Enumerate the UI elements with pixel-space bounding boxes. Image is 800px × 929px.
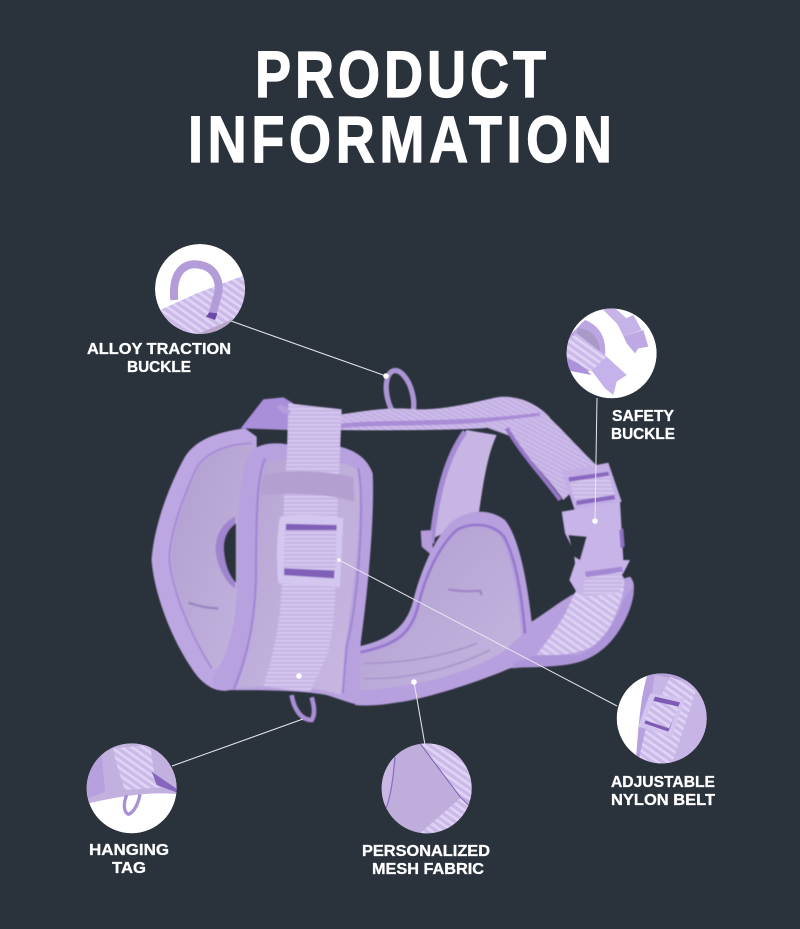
hanging tag ring: [292, 695, 314, 720]
left wing inner panel: [172, 445, 257, 673]
left wing piping: [169, 443, 252, 668]
right wing inner panel: [357, 527, 522, 690]
connector: alloy traction buckle: [231, 321, 389, 379]
label: safety buckle: BUCKLE: [611, 426, 675, 443]
label: alloy traction buckle: [87, 341, 231, 376]
connector: mesh fabric: [411, 679, 425, 745]
back strap: top band: [337, 397, 550, 430]
right wing stitch: [448, 589, 482, 595]
neck panel behind right wing: [430, 430, 497, 540]
title: PRODUCT: [255, 37, 546, 111]
neck panel edge: [432, 432, 465, 543]
right shoulder strap: [475, 415, 598, 500]
callout circle: hanging tag: [85, 742, 178, 833]
label: personalized mesh fabric: [362, 843, 490, 878]
label: safety buckle: [611, 408, 675, 443]
back strap: left: [241, 397, 293, 430]
label: alloy traction buckle: BUCKLE: [127, 359, 191, 376]
label: personalized mesh fabric: PERSONALIZED: [362, 843, 490, 860]
lower right webbing: [537, 572, 624, 655]
label: hanging tag: TAG: [112, 860, 146, 877]
keeper loop: [261, 471, 354, 502]
callout circle: alloy traction buckle: [155, 244, 250, 338]
right wing piping: [358, 525, 525, 653]
small side tab: [421, 530, 433, 557]
chest seam lines: [363, 643, 490, 679]
right wing outer padding: [355, 512, 634, 705]
title: INFORMATION: [188, 102, 612, 176]
callout circle: safety buckle: [563, 307, 657, 398]
label: hanging tag: HANGING: [89, 842, 169, 859]
upper buckle frame: [562, 463, 622, 514]
connector: hanging tag: [172, 673, 303, 766]
buckle body: [562, 502, 630, 595]
left wing stitch: [188, 603, 218, 608]
main strap: [263, 403, 342, 692]
callout circle: adjustable nylon belt: [617, 672, 708, 765]
label: hanging tag: [89, 842, 169, 877]
harness illustration: [152, 368, 634, 720]
connector: safety buckle: [592, 398, 598, 524]
label: adjustable nylon belt: [611, 774, 716, 809]
buckle: safety buckle: [562, 463, 630, 597]
label: adjustable nylon belt: NYLON BELT: [611, 792, 716, 809]
back strap edge: [340, 415, 540, 426]
strap through buckle: [568, 472, 615, 504]
leg hole: [216, 517, 235, 588]
title: [188, 37, 612, 176]
front panel piping: [233, 458, 361, 693]
lower right panel: [513, 587, 634, 668]
connector: adjustable nylon belt: [337, 558, 617, 706]
label: personalized mesh fabric: MESH FABRIC: [372, 861, 484, 878]
strap end snap: [276, 405, 291, 413]
callout circle: mesh fabric: [380, 742, 473, 835]
slider: adjustable nylon belt: [277, 515, 343, 587]
left wing outer padding: [152, 428, 257, 691]
buckle prongs gap: [568, 535, 587, 560]
shoulder strap underside: [507, 428, 560, 500]
front panel outer padding: [212, 443, 373, 705]
lower strap: [583, 567, 623, 597]
label: safety buckle: SAFETY: [612, 408, 675, 425]
d-ring: alloy traction buckle: [381, 368, 419, 424]
label: alloy traction buckle: ALLOY TRACTION: [87, 341, 231, 358]
label: adjustable nylon belt: ADJUSTABLE: [611, 774, 715, 791]
front panel inner: [237, 458, 360, 695]
